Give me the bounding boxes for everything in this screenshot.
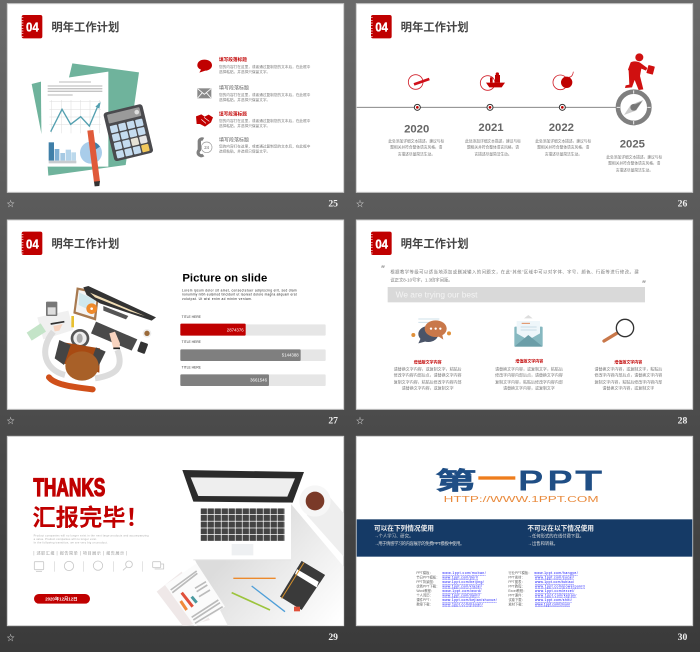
quote text: "	[381, 264, 385, 275]
icon: running man with folder	[625, 53, 655, 90]
milestone 2022: 题相关并符合整体语言风格，语	[537, 145, 590, 150]
caption column 1: 复制文字内容，粘贴后修改字内容内部	[394, 378, 462, 384]
logo: T	[575, 465, 603, 497]
badge 04: 04	[26, 20, 39, 35]
subtitle: 汇报完毕！	[32, 504, 149, 530]
list item 4	[198, 137, 311, 156]
illustration: person at desk from above	[27, 286, 156, 389]
links column 2: www.1ppt.com/sucai/	[535, 576, 574, 580]
links column 2: www.1ppt.com/shiti/	[535, 598, 572, 602]
caption column 3	[594, 359, 662, 391]
heading: 明年工作计划	[401, 20, 469, 34]
caption column 1: 增值版文字内容	[414, 359, 442, 365]
links column 2: www.1ppt.com/hangye/	[534, 571, 578, 575]
links column 2: 素材下载：	[508, 602, 525, 607]
links column 2: PPT图表：	[508, 579, 525, 584]
blue usage band: →任何形式的在线付费下载。	[528, 532, 584, 539]
page number: 27	[328, 415, 338, 426]
list item 3: 您的内容打在这里，或者通过复制您的文本后，在此框中	[219, 118, 311, 123]
panel: slide 28	[356, 220, 693, 426]
badge 04	[22, 15, 42, 38]
progress bar 2	[180, 340, 326, 361]
banner	[388, 287, 645, 302]
footer star: ☆	[7, 417, 15, 426]
body text: Lorem ipsum dolor sit amet, consectetuer adipiscing elit, sed diam	[182, 288, 297, 292]
icon: chat bubbles	[411, 319, 451, 343]
quote text	[381, 264, 646, 291]
milestone 2020: 题相关并符合整体语言风格，语	[390, 145, 443, 150]
milestone 2025: 题相关并符合整体语言风格，语	[608, 161, 661, 166]
list item 3: 填写段落标题	[219, 110, 247, 117]
icon: boat	[480, 72, 505, 90]
badge 04	[22, 232, 42, 255]
links column 1: 节日PPT模板：	[416, 575, 439, 580]
date pill: 2020年12月12日	[45, 596, 77, 603]
footer star: ☆	[356, 417, 364, 426]
description	[34, 533, 149, 545]
page number: 25	[328, 199, 338, 210]
progress bar 1	[180, 315, 326, 336]
footer star: ☆	[7, 634, 15, 643]
caption column 3: 请替换文字内容，或复制文字，粘贴后	[594, 365, 662, 371]
milestone 2021: 2021	[478, 122, 504, 134]
footer star: ☆	[7, 200, 15, 209]
icon: bomb	[553, 72, 573, 90]
blue usage band	[357, 519, 692, 557]
milestone 2022	[535, 122, 591, 156]
illustration: documents and calculator	[32, 63, 154, 186]
caption column 1: 修改字内容内部后点，请替换文字内容	[394, 372, 462, 378]
links column 2: 试卷下载：	[508, 597, 525, 602]
list item 4: 您的内容打在这里，或者通过复制您的文本后，在此框中	[219, 144, 311, 149]
badge 04	[371, 232, 392, 255]
caption column 3: 修改字内容内部后点，请替换文字内容	[594, 372, 662, 378]
heading: 明年工作计划	[51, 237, 119, 251]
links column 2: www.1ppt.com/tubiao/	[535, 580, 574, 584]
timeline	[357, 104, 617, 110]
milestone 2020: 言描述尽量简洁生动。	[398, 151, 435, 156]
links column 1: www.1ppt.com/moban/	[442, 571, 486, 575]
links column 1: www.1ppt.com/xiazai/	[442, 585, 482, 589]
links column 1: 个人简历：	[416, 593, 433, 598]
description: Product companies will no longer exist in the next large products and accompanying	[34, 533, 149, 537]
milestone 2021: 言描述尽量简洁生动。	[474, 151, 512, 156]
badge 04: 04	[375, 20, 388, 35]
progress bar 3: TITLE HERE	[182, 365, 202, 369]
links column 1: www.1ppt.com/beijing/	[442, 580, 484, 584]
icon: compass	[617, 90, 651, 124]
badge 04: 04	[375, 236, 388, 251]
milestone 2022: 言描述尽量简洁生动。	[545, 151, 582, 156]
milestone 2021	[465, 122, 521, 156]
milestone 2022: 2022	[549, 122, 574, 134]
description: In the following transition, we are very big on product.	[34, 541, 108, 545]
links column 2: www.1ppt.com/kejian/	[535, 594, 576, 598]
logo: P	[518, 465, 543, 497]
progress bar 1: 2874376	[227, 327, 244, 332]
milestone 2022: 此处添加详细文本描述，建议与标	[535, 138, 591, 143]
links column 1: www.1ppt.com/jieri/	[442, 576, 478, 580]
caption column 2	[495, 357, 563, 391]
panel: slide 29	[7, 436, 344, 643]
links column 2: PPT素材：	[508, 575, 525, 580]
body text	[182, 288, 297, 301]
caption column 2: 复制文字内容，粘贴后修改字内容内部	[495, 378, 563, 384]
panel: slide 25	[7, 4, 344, 210]
list item 1: 您的内容打在这里，或者通过复制您的文本后，在此框中	[219, 64, 311, 69]
list item 2: 填写段落标题	[219, 85, 249, 92]
blue usage band: 可以在下列情况使用	[374, 523, 434, 532]
caption column 2: 修改字内容内部后点，请替换文字内容	[495, 372, 563, 378]
badge 04	[371, 15, 392, 38]
outline icons row	[34, 561, 164, 572]
links column 1: 课件PPT：	[416, 597, 433, 602]
caption column 1: 请替换文字内容，或复制文字，粘贴后	[394, 365, 462, 371]
list item 2	[197, 85, 311, 102]
description: a value. Product companies will no longer exist.	[34, 537, 97, 541]
icon: pen in circle	[408, 75, 429, 89]
panel: slide 27	[7, 220, 344, 426]
caption column 3: 复制文字内容，粘贴后修改字内容内部	[594, 378, 662, 384]
logo: 第	[435, 468, 476, 495]
progress bar 2: 5144388	[282, 352, 299, 357]
heading: 明年工作计划	[401, 237, 469, 251]
icon: magnifying glass	[604, 319, 634, 341]
milestone 2021: 此处添加详细文本描述，建议与标	[465, 138, 521, 143]
links column 2	[508, 570, 585, 607]
date pill	[34, 594, 90, 604]
list item 4: 填写段落标题	[219, 137, 249, 144]
milestone 2025	[606, 139, 662, 172]
body text: volutpat. Ut wisi enim ad minim veniam.	[182, 297, 252, 301]
links column 2: Excel教程：	[508, 588, 526, 593]
list item 3: 选择粘贴，并选择只保留文字。	[219, 123, 270, 128]
panel: slide 26	[356, 4, 693, 210]
milestone 2021: 题相关并符合整体语言风格，语	[467, 145, 519, 150]
links column 1: PPT背景图：	[416, 579, 436, 584]
links column 1: 优秀PPT下载：	[416, 584, 439, 589]
badge 04: 04	[26, 236, 39, 251]
footer star: ☆	[356, 200, 364, 209]
links column 2: www.1ppt.com/zixun/	[535, 603, 570, 607]
caption column 1	[394, 359, 462, 391]
progress bar 2: TITLE HERE	[182, 340, 202, 344]
list item 2: 选择粘贴，并选择只保留文字。	[219, 97, 270, 102]
page number: 29	[328, 632, 338, 643]
tag row: | 述职汇报 | 报告简单 | 项目展示 | 报告展示 |	[33, 550, 127, 556]
milestone 2025: 此处添加详细文本描述，建议与标	[606, 154, 662, 159]
milestone 2025: 言描述尽量简洁生动。	[616, 167, 653, 172]
links column 1: 教案下载：	[416, 602, 433, 607]
links column 2: www.1ppt.com/powerpoint/	[535, 585, 585, 589]
links column 2: www.1ppt.com/excel/	[535, 589, 574, 593]
blue usage band: →出售和转载。	[528, 540, 558, 547]
caption column 2: 请替换文字内容，或复制文字	[503, 385, 555, 391]
page number: 30	[678, 632, 687, 643]
banner: We are trying our best	[396, 289, 478, 299]
milestone 2020: 此处添加详细文本描述，建议与标	[388, 138, 444, 143]
progress bar 1: TITLE HERE	[182, 315, 202, 319]
links column 1: www.1ppt.com/kejian/shuxue/	[442, 598, 497, 602]
progress bar 3: 3661546	[250, 377, 268, 382]
caption column 2: 请替换文字内容，或复制文字，粘贴后	[495, 365, 563, 371]
quote text: 议正文8-10号字，1.3倍字间距。	[390, 276, 453, 283]
list item 4: 选择粘贴，并选择只保留文字。	[219, 149, 270, 154]
icon: open envelope	[514, 315, 543, 347]
logo	[435, 465, 603, 504]
links column 1: www.1ppt.com/jiaoan/	[442, 603, 483, 607]
list item 3	[196, 110, 311, 128]
quote text: 根据教学等级可以适当地添加或删减输入的问题文，在此“其他”区域中可以对字体、字号、颜色、行距等进行修改。建	[390, 268, 639, 275]
caption column 3: 增值版文字内容	[614, 359, 642, 365]
logo: P	[547, 465, 573, 497]
quote text: "	[642, 280, 646, 291]
caption column 2: 增值版文字内容	[515, 357, 543, 363]
caption column 3: 请替换文字内容，或复制文字	[602, 385, 654, 391]
links column 1: www.1ppt.com/word/	[442, 589, 481, 593]
links column 1: www.1ppt.com/jianli/	[442, 594, 480, 598]
slide heading: Picture on slide	[182, 272, 267, 284]
logo: HTTP://WWW.1PPT.COM	[444, 494, 599, 504]
milestone 2020: 2020	[404, 124, 429, 136]
links column 2: 行业PPT模板：	[508, 570, 531, 575]
list item 2: 您的内容打在这里，或者通过复制您的文本后，在此框中	[219, 92, 311, 97]
caption column 1: 请替换文字内容，或复制文字	[402, 385, 454, 391]
page number: 26	[678, 199, 687, 210]
list item 1: 填写段落标题	[219, 56, 247, 63]
milestone 2020	[388, 124, 444, 156]
links column 1: PPT模板：	[416, 570, 433, 575]
blue usage band: 不可以在以下情况使用	[527, 523, 594, 532]
list item 4: 24	[204, 145, 210, 150]
heading: 明年工作计划	[51, 20, 119, 34]
panel: slide 30	[356, 436, 693, 643]
links column 2: PPT课件：	[508, 593, 525, 598]
progress bar 3	[180, 365, 326, 386]
THANKS title: THANKS	[33, 474, 105, 502]
list item 1	[197, 56, 311, 74]
links column 1	[416, 570, 497, 607]
blue usage band: →用于情感学习的内容展示的免费PPT模板中使用。	[374, 540, 464, 547]
links column 2: PPT教程：	[508, 584, 525, 589]
blue usage band: →个人学习、研究。	[374, 532, 413, 539]
page number: 28	[678, 415, 687, 426]
milestone 2025: 2025	[620, 139, 645, 151]
list item 1: 选择粘贴，并选择只保留文字。	[219, 69, 270, 74]
links column 1: Word教程：	[416, 588, 434, 593]
illustration: laptop on desk	[157, 470, 344, 627]
body text: nonummy nibh euismod tincidunt ut laoreet dolore magna aliquam erat	[182, 293, 297, 297]
